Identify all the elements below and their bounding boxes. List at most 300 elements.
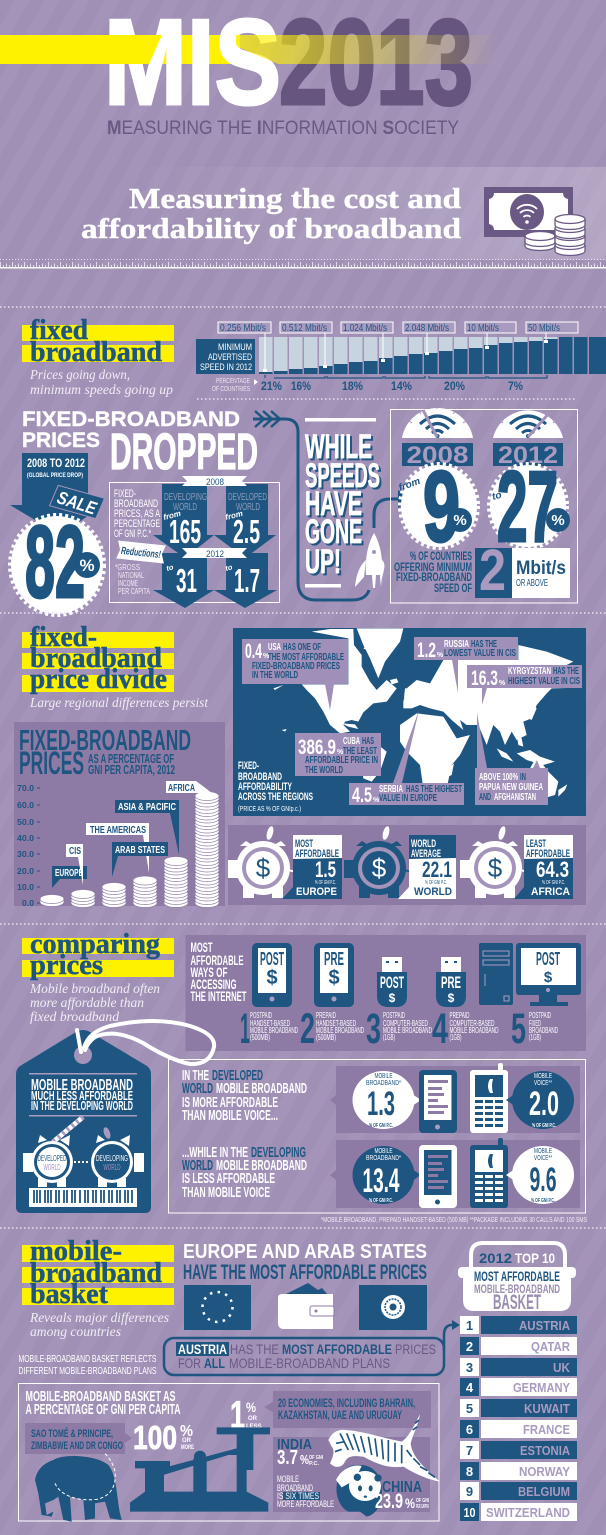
text: map caption: BROADBAND — [238, 771, 282, 783]
list: access methods: POSTPAID — [529, 1011, 551, 1020]
stat: 100 percent or more: 100 — [133, 1419, 177, 1456]
text: while speeds have gone up: UP! — [307, 545, 343, 583]
basket: 2012 top 10: BASKET — [493, 1291, 541, 1314]
text: developed world: IN THE — [182, 1068, 209, 1084]
piggy: most affordable: 1.5 — [315, 857, 336, 882]
list: access methods: POSTPAID — [250, 1011, 272, 1020]
text: map caption: ACROSS THE REGIONS — [238, 791, 313, 803]
rank 6: France — [460, 1420, 577, 1438]
gauge: wifi 2012: 2012 — [498, 442, 558, 469]
subtitle: Measuring the Information Society: MEASURING THE INFORMATION SOCIETY — [107, 118, 459, 139]
section heading: fixed-broadband price divide: broadband — [30, 643, 162, 674]
chart axis: 70.0 — [17, 784, 35, 793]
label: CIS — [66, 844, 83, 885]
icon: prepaid handset — [314, 943, 354, 1007]
callout: Serbia 4.5 percent: HAS THE HIGHEST — [406, 783, 462, 795]
callout: Austria most affordable: PRICES — [395, 1342, 436, 1357]
piggy: world average: WORLD — [411, 838, 436, 850]
callout: Serbia 4.5 percent — [349, 710, 464, 807]
comparison row: developed world: BROADBAND* — [366, 1078, 401, 1087]
box: India versus China: 3.7 — [277, 1447, 298, 1469]
label: Arab States — [112, 842, 168, 877]
piggy: most affordable: AFFORDABLE — [295, 848, 339, 860]
chart: minimum advertised speed: 14% — [391, 381, 412, 393]
arrow: developing world 2012 — [153, 553, 214, 608]
rank 7: Estonia: 7 — [466, 1443, 473, 1458]
list: access methods: POSTPAID — [383, 1011, 405, 1020]
callout: above 100 percent: IN — [520, 771, 526, 783]
text: while speeds have gone up: SPEEDS — [307, 459, 382, 497]
text: basket reflects plans: MOBILE-BROADBAND BASKET REFLECTS — [18, 1353, 156, 1365]
coin stack: Asia and Pacific — [164, 856, 188, 908]
chart: minimum advertised speed: PERCENTAGE — [216, 376, 250, 385]
rank 1: Austria: AUSTRIA — [519, 1318, 571, 1333]
panel: most affordable ways of accessing the internet: MOST — [190, 939, 213, 955]
text: developed world: MOBILE BROADBAND — [216, 1081, 307, 1097]
rank 10: Switzerland: 10 — [464, 1505, 476, 1520]
chart: minimum advertised speed: 21% — [261, 381, 282, 393]
list: access methods: (1GB) — [529, 1033, 541, 1042]
heading: Europe and Arab States: EUROPE AND ARAB STATES — [183, 1241, 427, 1263]
text: developing world: WORLD — [182, 1158, 213, 1174]
callout: 2 Mbit/s: OR ABOVE — [516, 578, 548, 589]
panel: price comparison by world — [110, 476, 280, 608]
rank 5: Kuwait — [460, 1399, 577, 1417]
box: India versus China: MOBILE — [277, 1474, 299, 1484]
chart axis: 60.0 — [17, 801, 35, 810]
tag text: MUCH LESS AFFORDABLE — [31, 1088, 133, 1103]
comparison row: developing world: BROADBAND* — [366, 1153, 401, 1162]
list: access methods — [240, 1005, 558, 1053]
callout: Kyrgyzstan 16.3 percent: KYRGYZSTAN — [508, 665, 551, 677]
list: access methods: (500MB) — [316, 1033, 336, 1042]
section heading: comparing prices: fixed broadband — [30, 1010, 120, 1025]
list: access methods: MOBILE BROADBAND — [250, 1026, 298, 1035]
chart: minimum advertised speed: ADVERTISED — [208, 352, 252, 363]
gauge: wifi 2008: 2008 — [406, 442, 468, 469]
chart: minimum advertised speed: 20% — [444, 381, 465, 393]
panel: price comparison by world: OF GNI P.C.* — [114, 528, 151, 540]
rank 5: Kuwait: 5 — [466, 1401, 473, 1416]
chart: minimum advertised speed: 50 Mbit/s — [528, 322, 560, 334]
chart: minimum advertised speed: 2.048 Mbit/s — [405, 322, 449, 334]
divider — [197, 398, 576, 400]
chart: minimum advertised speed: 1.024 Mbit/s — [343, 322, 387, 334]
panel: price comparison by world: PERCENTAGE — [114, 518, 160, 530]
burst: to 27 percent — [490, 451, 570, 563]
arrow: developing world 2008: from — [162, 509, 182, 522]
callout: Cuba 386.9 percent: 386.9 — [298, 736, 336, 759]
callout: Austria most affordable: FOR — [178, 1356, 201, 1371]
panel: coin stacks chart — [14, 722, 225, 908]
divider — [0, 1227, 606, 1229]
callout: USA 0.4 percent: HAS ONE OF — [283, 641, 321, 653]
section heading: comparing prices: comparing — [30, 929, 160, 960]
chart: minimum advertised speed: 7% — [508, 381, 523, 393]
callout: Kyrgyzstan 16.3 percent: % — [499, 680, 506, 687]
coin stack: Africa — [195, 792, 219, 908]
rank 3: UK: UK — [553, 1360, 571, 1375]
tag text — [29, 1073, 137, 1116]
text: developed world: THAN MOBILE VOICE... — [182, 1108, 278, 1124]
piggy: world average: AVERAGE — [411, 848, 441, 860]
gauge: wifi 2012 — [493, 405, 563, 469]
text: developing world: IS LESS AFFORDABLE — [182, 1171, 275, 1187]
callout: Cuba 386.9 percent: THE LEAST — [343, 745, 377, 757]
list: access methods: 4 — [432, 1005, 448, 1053]
mini piggy: developed world — [23, 1135, 73, 1187]
icon: European flag — [184, 1285, 251, 1330]
rank 6: France: 6 — [466, 1422, 473, 1437]
chart: minimum advertised speed: 16% — [291, 381, 311, 393]
heading: Europe and Arab States: HAVE THE MOST AFFORDABLE PRICES — [183, 1261, 427, 1284]
basket: 2012 top 10: MOBILE-BROADBAND — [474, 1282, 560, 1296]
icon: prepaid handset: $ — [328, 967, 340, 989]
callout: Austria most affordable: MOBILE-BROADBAND PLANS — [229, 1356, 390, 1371]
stat: 1 percent or less — [230, 1394, 262, 1437]
arrow: developing world 2012: 31 — [176, 562, 197, 599]
section heading: comparing prices — [22, 929, 174, 1025]
burst: to 27 percent: % — [551, 512, 565, 529]
arrow: developed world 2012: 1.7 — [234, 562, 260, 599]
label: The Americas: THE AMERICAS — [90, 824, 146, 836]
section heading: fixed-broadband price divide: price divide — [30, 664, 167, 695]
tag text: IN THE DEVELOPING WORLD — [31, 1098, 133, 1113]
arrow: developed world 2012 — [214, 553, 277, 608]
section heading: comparing prices: prices — [30, 950, 103, 981]
comparison row: developing world: VOICE** — [534, 1153, 552, 1162]
price tag: mobile broadband less affordable — [16, 1021, 214, 1213]
text: developed world: WORLD — [182, 1081, 213, 1097]
comparison row: developing world: MOBILE — [534, 1146, 552, 1155]
chart axis: 10.0 — [17, 883, 35, 892]
burst: from 9 percent: 9 — [423, 451, 460, 563]
icon: wallet — [278, 1283, 334, 1329]
comparison row: developing world: 9.6 — [530, 1161, 556, 1199]
rank 2: Qatar: 2 — [466, 1339, 473, 1354]
piggy: most affordable — [228, 825, 342, 899]
callout: Austria most affordable: AUSTRIA — [178, 1342, 227, 1357]
list: access methods: HANDSET-BASED — [250, 1019, 290, 1028]
box: India versus China: INDIA — [277, 1436, 312, 1453]
chart title: FIXED-BROADBAND — [19, 725, 191, 757]
rank 2: Qatar — [460, 1337, 577, 1355]
icon: Arab League flag — [359, 1285, 427, 1330]
arrow: developing world 2008: 165 — [169, 513, 201, 550]
section heading: fixed broadband — [22, 315, 174, 398]
text: developed world: DEVELOPED — [212, 1068, 263, 1084]
piggy: world average: % OF GNI P.C. — [425, 880, 447, 886]
rank 4: Germany: 4 — [466, 1380, 474, 1395]
burst: from 9 percent: from — [397, 476, 422, 494]
arrow: developing world 2008 — [153, 484, 214, 558]
rank 4: Germany — [460, 1378, 577, 1396]
chart title: AS A PERCENTAGE OF — [88, 751, 174, 766]
box: India versus China: OF GNI — [309, 1455, 323, 1461]
panel: most affordable ways of accessing the internet: ACCESSING — [190, 976, 237, 992]
list: access methods: 1 — [240, 1005, 250, 1053]
callout: Russia 1.2 percent: LOWEST VALUE IN CIS — [444, 647, 516, 659]
chart: minimum advertised speed: 0.512 Mbit/s — [282, 322, 327, 334]
arrow: developed world 2012: to — [224, 562, 234, 573]
arrow: developing world 2008: WORLD — [173, 501, 197, 513]
text: percent of countries: FIXED-BROADBAND — [396, 570, 472, 584]
comparison row: developed world: MOBILE — [374, 1071, 392, 1080]
list: access methods: MOBILE BROADBAND — [383, 1026, 432, 1035]
panel: most affordable ways of accessing the internet — [186, 935, 586, 1053]
rank 1: Austria: 1 — [466, 1318, 473, 1333]
piggy: world average — [344, 825, 456, 899]
title band — [0, 167, 606, 268]
piggy: least affordable — [460, 825, 573, 899]
section heading: mobile-broadband basket: basket — [30, 1279, 109, 1310]
callout: above 100 percent — [475, 713, 548, 805]
text: developing world — [182, 1145, 307, 1201]
piggy: least affordable: 64.3 — [536, 857, 569, 882]
panel: 2 Mbit/s countries — [390, 405, 578, 603]
list: access methods: COMPUTER-BASED — [383, 1019, 428, 1028]
icon: postpaid handset: $ — [266, 967, 278, 989]
text: percent of countries: % OF COUNTRIES — [410, 549, 472, 563]
panel: most affordable ways of accessing the internet: THE INTERNET — [190, 988, 247, 1004]
stat: 1 percent or less: 1 — [230, 1394, 245, 1437]
text: map caption — [238, 760, 313, 813]
text: while speeds have gone up: HAVE — [305, 485, 362, 523]
stat: 100 percent or more: % — [180, 1423, 193, 1440]
callout: above 100 percent: AND — [479, 791, 491, 803]
callout: Kyrgyzstan 16.3 percent: 16.3 — [471, 667, 498, 690]
callout: USA 0.4 percent: % — [263, 653, 270, 660]
rank 8: Norway — [460, 1462, 577, 1480]
icon: banknote and coins — [484, 187, 585, 256]
rope and string — [53, 1021, 214, 1142]
piggy: most affordable: EUROPE — [296, 886, 337, 898]
text: percent of countries: OFFERING MINIMUM — [394, 560, 472, 574]
basket: 2012 top 10: 2012 — [479, 1250, 512, 1266]
box: India versus China — [273, 1436, 430, 1512]
text: while speeds have gone up: HAVE — [307, 487, 364, 525]
rank 7: Estonia — [460, 1441, 577, 1459]
coin stack: Europe — [40, 894, 64, 906]
text: percent of countries — [394, 549, 472, 595]
burst: from 9 percent: % — [453, 512, 467, 529]
text: while speeds have gone up: GONE — [305, 513, 362, 551]
rank 5: Kuwait: KUWAIT — [524, 1401, 570, 1416]
arrow: developed world 2008: DEVELOPED — [228, 491, 267, 503]
comparison row: developing world: % OF GNI P.C. — [369, 1198, 393, 1204]
callout: USA 0.4 percent — [242, 639, 348, 710]
arrow: developed world 2008 — [214, 484, 276, 558]
rank 10: Switzerland: SWITZERLAND — [486, 1505, 570, 1520]
icon: rocket — [355, 533, 384, 588]
icon: balance scale — [130, 1427, 270, 1512]
coin stack: Arab States — [102, 882, 126, 908]
stat: China 23.9 percent: % — [405, 1495, 415, 1511]
sticker: sale: SALE — [55, 487, 100, 519]
rank 9: Belgium: BELGIUM — [518, 1484, 570, 1499]
chart: minimum advertised speed — [196, 322, 606, 393]
box: India versus China: MORE AFFORDABLE — [277, 1499, 334, 1509]
arrow: developed world 2008: WORLD — [236, 501, 260, 513]
burst: to 27 percent: 27 — [497, 451, 558, 563]
burst: 82 percent — [10, 505, 104, 619]
section heading: mobile-broadband basket: broadband — [30, 1258, 162, 1289]
comparison row: developed world: MOBILE — [534, 1071, 552, 1080]
heading: fixed-broadband prices dropped: DROPPED — [110, 423, 258, 480]
callout: Kyrgyzstan 16.3 percent: HAS THE — [553, 665, 579, 677]
section heading: mobile-broadband basket: mobile- — [30, 1236, 122, 1267]
chart title — [19, 725, 191, 781]
heading: Europe and Arab States — [183, 1241, 427, 1284]
label: CIS: CIS — [69, 845, 81, 857]
ribbon: 2012 — [182, 548, 247, 560]
arrow: global price drop: (GLOBAL PRICE DROP) — [27, 472, 83, 479]
box: Sao Tome, Zimbabwe, DR Congo: SAO TOMÉ & PRINCIPE, — [31, 1427, 113, 1440]
section heading: fixed-broadband price divide: Large regional differences persist — [29, 696, 209, 711]
note: gross national income — [115, 562, 150, 596]
main title: Measuring the cost and — [129, 183, 461, 215]
text: basket reflects plans: DIFFERENT MOBILE-BROADBAND PLANS — [18, 1365, 156, 1377]
icon: prepaid handset: PRE — [324, 949, 344, 969]
rank 7: Estonia: ESTONIA — [520, 1443, 571, 1458]
divider — [0, 306, 606, 308]
piggy: world average: 22.1 — [422, 857, 452, 882]
text: developing world: MOBILE BROADBAND — [216, 1158, 307, 1174]
callout: 2 Mbit/s: Mbit/s — [516, 558, 566, 579]
rank 1: Austria — [460, 1316, 577, 1334]
list: access methods: COMPUTER-BASED — [450, 1019, 495, 1028]
icon: postpaid USB modem: $ — [389, 991, 396, 1005]
icon: tiger — [328, 1414, 440, 1482]
text: map caption: AFFORDABILITY — [238, 781, 292, 793]
icon: prepaid USB modem: PRE — [441, 973, 461, 992]
label: Arab States: ARAB STATES — [115, 844, 165, 856]
list: top 10 countries — [460, 1316, 577, 1521]
callout: Austria most affordable — [164, 1320, 460, 1375]
list: access methods: FIXED — [529, 1019, 541, 1028]
stat: China 23.9 percent: OF GNI — [416, 1498, 429, 1504]
box: 20 economies: KAZAKHSTAN, UAE AND URUGUAY — [278, 1410, 402, 1422]
burst: 82 percent: 82 — [25, 505, 85, 619]
text: developing world: THAN MOBILE VOICE — [182, 1185, 270, 1201]
label: The Americas — [86, 823, 149, 873]
rank 3: UK — [460, 1358, 577, 1376]
chart: minimum advertised speed: 18% — [342, 381, 363, 393]
heading: fixed-broadband prices dropped: PRICES — [22, 429, 100, 452]
panel: piggy banks — [228, 825, 586, 905]
callout: USA 0.4 percent: IN THE WORLD — [252, 669, 298, 681]
chart: minimum advertised speed: 10 Mbit/s — [467, 322, 499, 334]
comparison row: developing world: MOBILE — [374, 1146, 392, 1155]
section heading: comparing prices: more affordable than — [30, 996, 144, 1011]
stat: 1 percent or less: % — [246, 1399, 256, 1415]
callout: Russia 1.2 percent: 1.2 — [417, 639, 436, 662]
text: while speeds have gone up: SPEEDS — [305, 457, 380, 495]
stat: China 23.9 percent: 23.9 — [375, 1490, 403, 1513]
chart title: GNI PER CAPITA, 2012 — [88, 762, 175, 777]
banner: reductions: Reductions! — [120, 545, 162, 561]
callout: USA 0.4 percent: USA — [268, 641, 281, 653]
tag text: MOBILE BROADBAND — [31, 1077, 133, 1094]
chart title: PRICES — [19, 745, 84, 781]
comparison row: developed world — [330, 1063, 580, 1133]
piggy: least affordable: AFRICA — [531, 886, 570, 898]
list: access methods: PREPAID — [316, 1011, 336, 1020]
text: percent of countries: SPEED OF — [434, 581, 472, 595]
piggy: most affordable: % OF GNI P.C. — [315, 880, 336, 886]
callout: Austria most affordable: MOST AFFORDABLE — [282, 1342, 392, 1357]
header: MIS 2013 logo — [0, 0, 500, 130]
text: developing world: DEVELOPING — [251, 1145, 306, 1161]
piggy: most affordable: MOST — [295, 838, 313, 850]
heading: fixed-broadband prices dropped — [22, 408, 258, 480]
callout: above 100 percent: PAPUA NEW GUINEA — [479, 781, 543, 793]
chart: minimum advertised speed: 0.256 Mbit/s — [220, 322, 266, 334]
list: access methods: MOBILE BROADBAND — [450, 1026, 499, 1035]
text: while speeds have gone up: WHILE — [307, 430, 374, 468]
icon: prepaid USB modem — [436, 957, 466, 1007]
divider — [0, 612, 606, 614]
callout: Serbia 4.5 percent: SERBIA — [379, 783, 403, 795]
panel: most affordable ways of accessing the internet: AFFORDABLE — [190, 952, 244, 968]
callout: above 100 percent: ABOVE 100% — [479, 771, 518, 783]
chart: minimum advertised speed: MINIMUM — [218, 342, 252, 353]
callout: Austria most affordable: ALL — [204, 1356, 225, 1371]
callout: Russia 1.2 percent: HAS THE — [471, 638, 497, 650]
arrow: global price drop: 2008 TO 2012 — [27, 456, 85, 470]
rank 2: Qatar: QATAR — [531, 1339, 571, 1354]
label: Asia and Pacific — [115, 800, 179, 855]
section heading: fixed-broadband price divide: fixed- — [30, 622, 97, 653]
arrow: developing world 2008: DEVELOPING — [164, 491, 207, 503]
rank 10: Switzerland — [460, 1503, 577, 1521]
chart axis — [17, 784, 40, 908]
main title: affordability of broadband — [81, 213, 461, 245]
list: access methods: HANDSET-BASED — [316, 1019, 356, 1028]
text: developing world: ...WHILE IN THE — [182, 1145, 248, 1161]
icon: desktop computer: POST — [536, 949, 560, 969]
stat: 100 percent or more: OR — [182, 1438, 192, 1444]
list: access methods: 3 — [366, 1005, 381, 1053]
callout: above 100 percent: AFGHANISTAN — [494, 791, 536, 803]
comparison row: developing world — [330, 1138, 580, 1208]
callout: Cuba 386.9 percent: THE WORLD — [305, 764, 343, 776]
callout: Cuba 386.9 percent: % — [337, 749, 344, 756]
piggy: least affordable: $ — [488, 853, 503, 883]
map: world continents — [273, 628, 582, 800]
rank 8: Norway: NORWAY — [519, 1464, 570, 1479]
stat: 1 percent or less: LESS — [246, 1424, 262, 1430]
chart axis: 0.0 — [22, 899, 35, 908]
comparison row: developed world: % OF GNI P.C. — [369, 1123, 393, 1129]
ribbon: 2008 — [182, 476, 247, 488]
list: access methods: 5 — [511, 1005, 526, 1053]
burst: 82 percent: % — [79, 556, 95, 575]
section heading: fixed broadband: Prices going down, — [29, 368, 130, 383]
burst: from 9 percent — [397, 451, 478, 563]
rank 6: France: FRANCE — [523, 1422, 570, 1437]
label: Europe: EUROPE — [55, 867, 83, 879]
section heading: fixed broadband: fixed — [30, 315, 88, 346]
list: access methods: BROADBAND — [529, 1026, 558, 1035]
box: India versus China: BROADBAND — [277, 1483, 313, 1493]
list: access methods: PREPAID — [450, 1011, 470, 1020]
chart axis: 30.0 — [17, 850, 35, 859]
callout: Serbia 4.5 percent: % — [373, 797, 380, 804]
callout: Kyrgyzstan 16.3 percent — [467, 665, 582, 705]
text: while speeds have gone up: UP! — [305, 543, 341, 581]
list: access methods: (1GB) — [450, 1033, 462, 1042]
